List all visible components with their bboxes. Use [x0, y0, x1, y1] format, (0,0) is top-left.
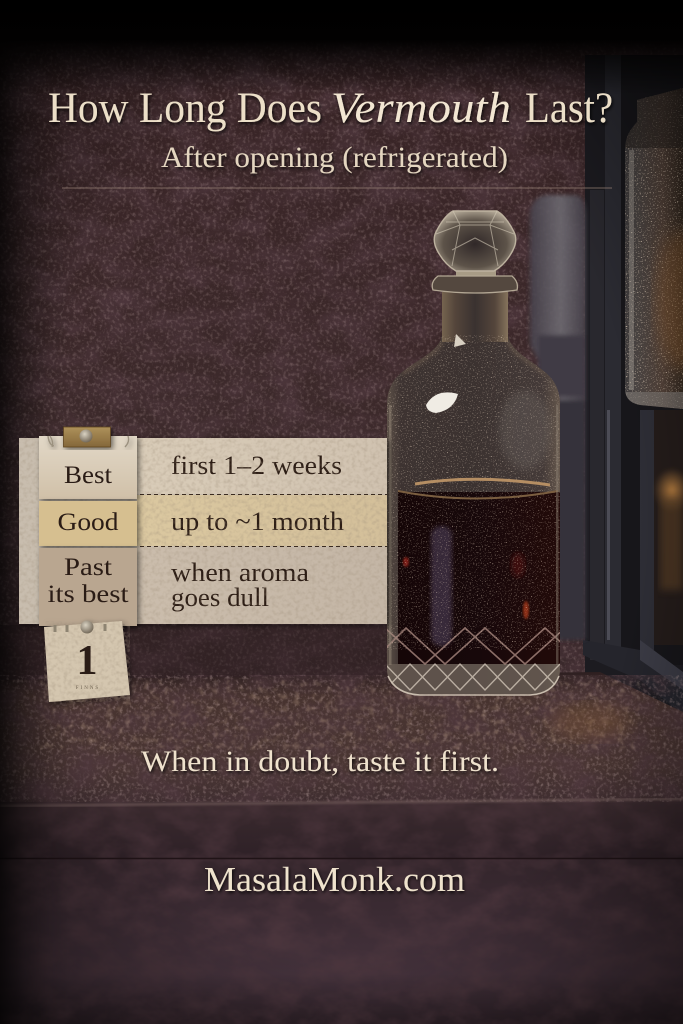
small calendar	[44, 620, 130, 702]
tab: past its best	[39, 548, 137, 626]
stopper	[434, 211, 516, 278]
tab: best	[39, 436, 137, 499]
dust on glass	[387, 335, 560, 650]
tab: good: Good	[58, 509, 119, 536]
tab: past its best: Past	[64, 554, 112, 581]
blurred bottle behind	[530, 195, 586, 640]
row: best: first 1–2 weeks	[171, 450, 342, 480]
tab: best: Best	[64, 462, 112, 489]
bottle lip	[432, 276, 517, 293]
header rule	[62, 187, 612, 189]
fridge interior at right	[583, 55, 683, 715]
surface ring	[415, 479, 550, 485]
liquid	[398, 492, 560, 664]
glass highlights	[426, 392, 458, 413]
tagline: When in doubt, taste it first.	[141, 746, 499, 778]
bottle	[387, 210, 560, 696]
panel backing	[19, 438, 387, 624]
small calendar: 1	[76, 638, 98, 684]
row: past its best	[137, 547, 387, 624]
neck shading	[442, 292, 508, 342]
status table	[19, 427, 387, 626]
title	[48, 85, 613, 132]
title: How Long Does	[48, 85, 322, 132]
subtitle: After opening (refrigerated)	[161, 141, 508, 174]
title: Last?	[525, 85, 613, 132]
row: past its best: goes dull	[171, 582, 269, 612]
website: MasalaMonk.com	[204, 860, 465, 899]
liquid reflection	[431, 526, 452, 646]
row: good: up to ~1 month	[171, 506, 344, 536]
small calendar: FINNS	[76, 686, 100, 691]
lower base panel	[0, 858, 683, 1024]
row: past its best: when aroma	[171, 557, 309, 587]
counter top	[0, 672, 683, 806]
shoulder sheen	[402, 340, 545, 374]
jar in fridge	[625, 88, 683, 410]
title: Vermouth	[331, 85, 511, 132]
cut glass base	[387, 664, 560, 694]
glass body	[387, 292, 560, 694]
counter front edge	[0, 799, 683, 858]
tab: good	[39, 501, 137, 546]
tab: past its best: its best	[48, 581, 129, 608]
brass clip	[48, 427, 129, 447]
row: good	[137, 495, 387, 546]
bottom rim	[388, 676, 559, 695]
row: best	[137, 438, 387, 494]
